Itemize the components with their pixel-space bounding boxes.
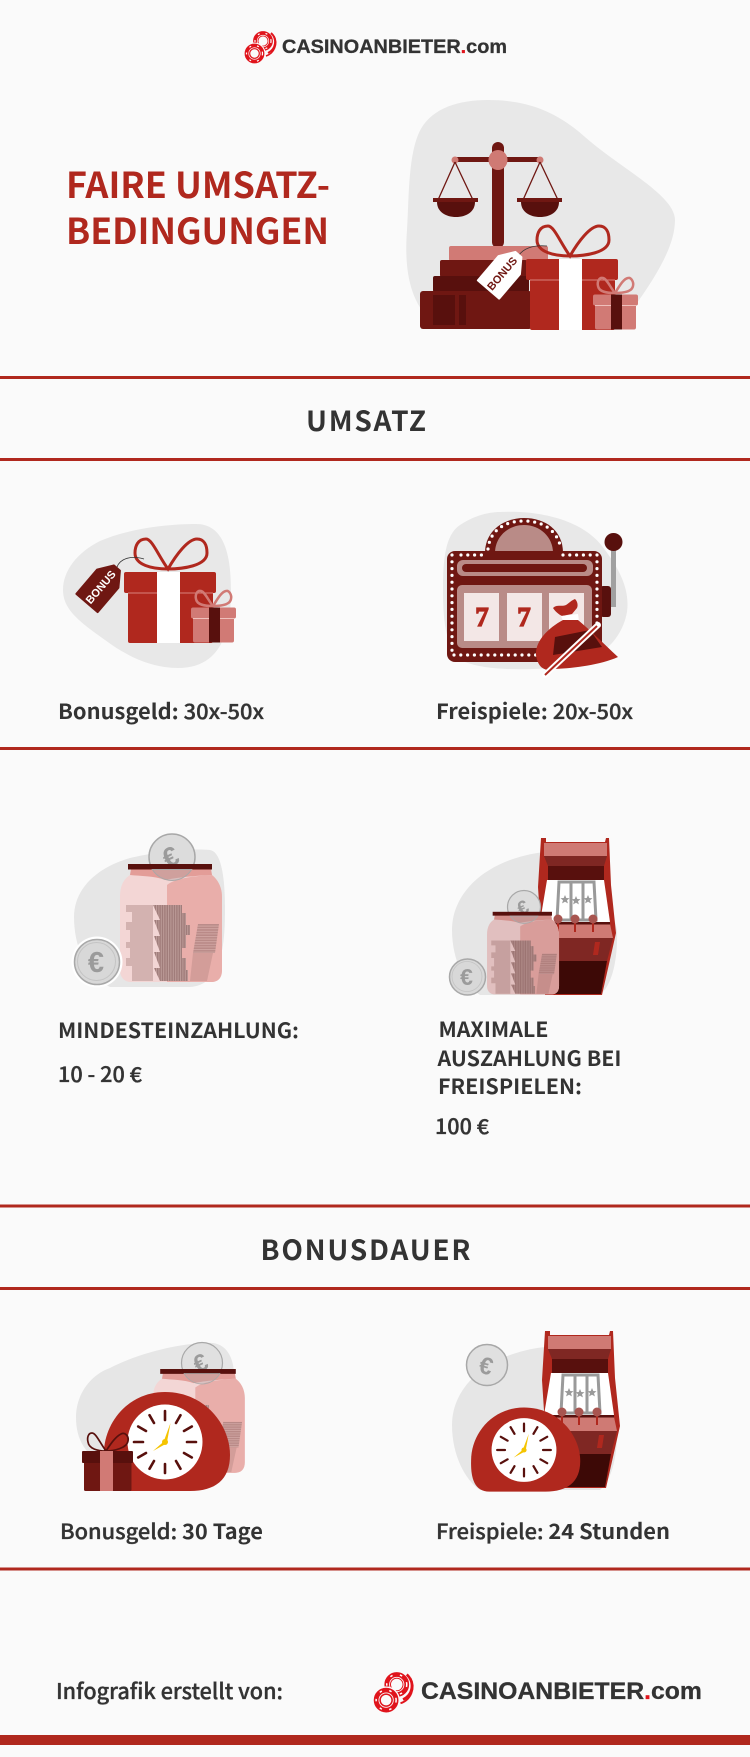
icon: money bag with strike — [536, 599, 618, 675]
panel: Freispiele Umsatz — [436, 512, 633, 726]
icon: coin — [508, 890, 540, 924]
icon: gifts — [526, 226, 638, 330]
coin seen through jar neck — [152, 870, 192, 880]
heading: AUSZAHLUNG BEI — [436, 1043, 622, 1073]
hero illustration: scales, books and gifts — [406, 100, 675, 330]
icon: coin: € — [514, 897, 533, 920]
value: 100 € — [435, 1111, 489, 1141]
icon: jar — [153, 1369, 245, 1473]
icon: gift — [82, 1433, 133, 1491]
coin seen through jar neck — [184, 1374, 220, 1384]
heading: Umsatz: UMSATZ — [306, 400, 426, 440]
panel: Mindesteinzahlung — [58, 834, 299, 1089]
icon: arcade machine — [542, 1331, 620, 1488]
icon: coin: € — [157, 840, 184, 874]
icon: jar — [120, 864, 222, 982]
icon: bonus tag: BONUS — [84, 569, 119, 607]
icon: coin — [450, 959, 486, 995]
divider line — [0, 458, 750, 461]
icon: gifts — [124, 539, 236, 643]
icon: coin: € — [460, 964, 473, 990]
icon: coin — [149, 834, 195, 880]
icon: coin — [182, 1342, 222, 1384]
panel: Freispiele Dauer — [436, 1331, 670, 1546]
icon: clock — [104, 1392, 230, 1491]
icon: stack of books — [420, 246, 548, 329]
icon: coin — [72, 936, 122, 988]
heading: Bonusdauer: BONUSDAUER — [260, 1229, 470, 1269]
icon: slot machine — [447, 518, 622, 662]
title: FAIRE UMSATZ- — [66, 158, 330, 209]
heading: MAXIMALE — [438, 1014, 548, 1044]
heading — [436, 1014, 622, 1101]
panel: Bonusgeld Dauer — [60, 1342, 263, 1546]
footer logo: CASINOANBIETER.com — [421, 1678, 702, 1705]
divider line — [0, 1204, 750, 1208]
panel: Maximale Auszahlung — [435, 838, 622, 1141]
footer logo — [376, 1674, 702, 1710]
footer credit text: Infografik erstellt von: — [56, 1674, 283, 1706]
icon: bonus tag — [76, 557, 144, 612]
heading: MINDESTEINZAHLUNG: — [58, 1015, 299, 1045]
label: Freispiele: 20x-50x — [436, 696, 633, 726]
icon: arcade machine — [538, 838, 616, 995]
header logo — [246, 33, 507, 62]
icon: coin: € — [189, 1348, 213, 1379]
value: 10 - 20 € — [58, 1059, 142, 1089]
coin seen through jar neck — [510, 916, 538, 923]
jar shading — [487, 915, 559, 994]
divider line — [0, 1287, 750, 1290]
label: Freispiele: 24 Stunden — [436, 1516, 670, 1546]
divider line — [0, 376, 750, 379]
footer bar — [0, 1735, 750, 1745]
icon: coin — [466, 1344, 508, 1386]
divider line — [0, 1568, 750, 1570]
divider line — [0, 747, 750, 750]
icon: bonus tag: BONUS — [485, 255, 520, 293]
icon: clock — [471, 1408, 580, 1492]
icon: coin: € — [476, 1352, 496, 1381]
label: Bonusgeld: 30 Tage — [60, 1516, 263, 1546]
icon: slot machine: 7 — [517, 602, 531, 632]
heading: FREISPIELEN: — [438, 1071, 582, 1101]
icon: bonus tag — [478, 245, 547, 299]
panel: Bonusgeld Umsatz — [58, 524, 264, 726]
header logo: CASINOANBIETER.com — [282, 36, 507, 58]
title — [66, 158, 330, 255]
label: Bonusgeld: 30x-50x — [58, 696, 264, 726]
icon: slot machine: 7 — [475, 602, 489, 632]
icon: scales — [433, 142, 562, 248]
title: BEDINGUNGEN — [66, 204, 329, 255]
icon: coin: € — [88, 947, 104, 979]
icon: jar — [487, 912, 559, 994]
